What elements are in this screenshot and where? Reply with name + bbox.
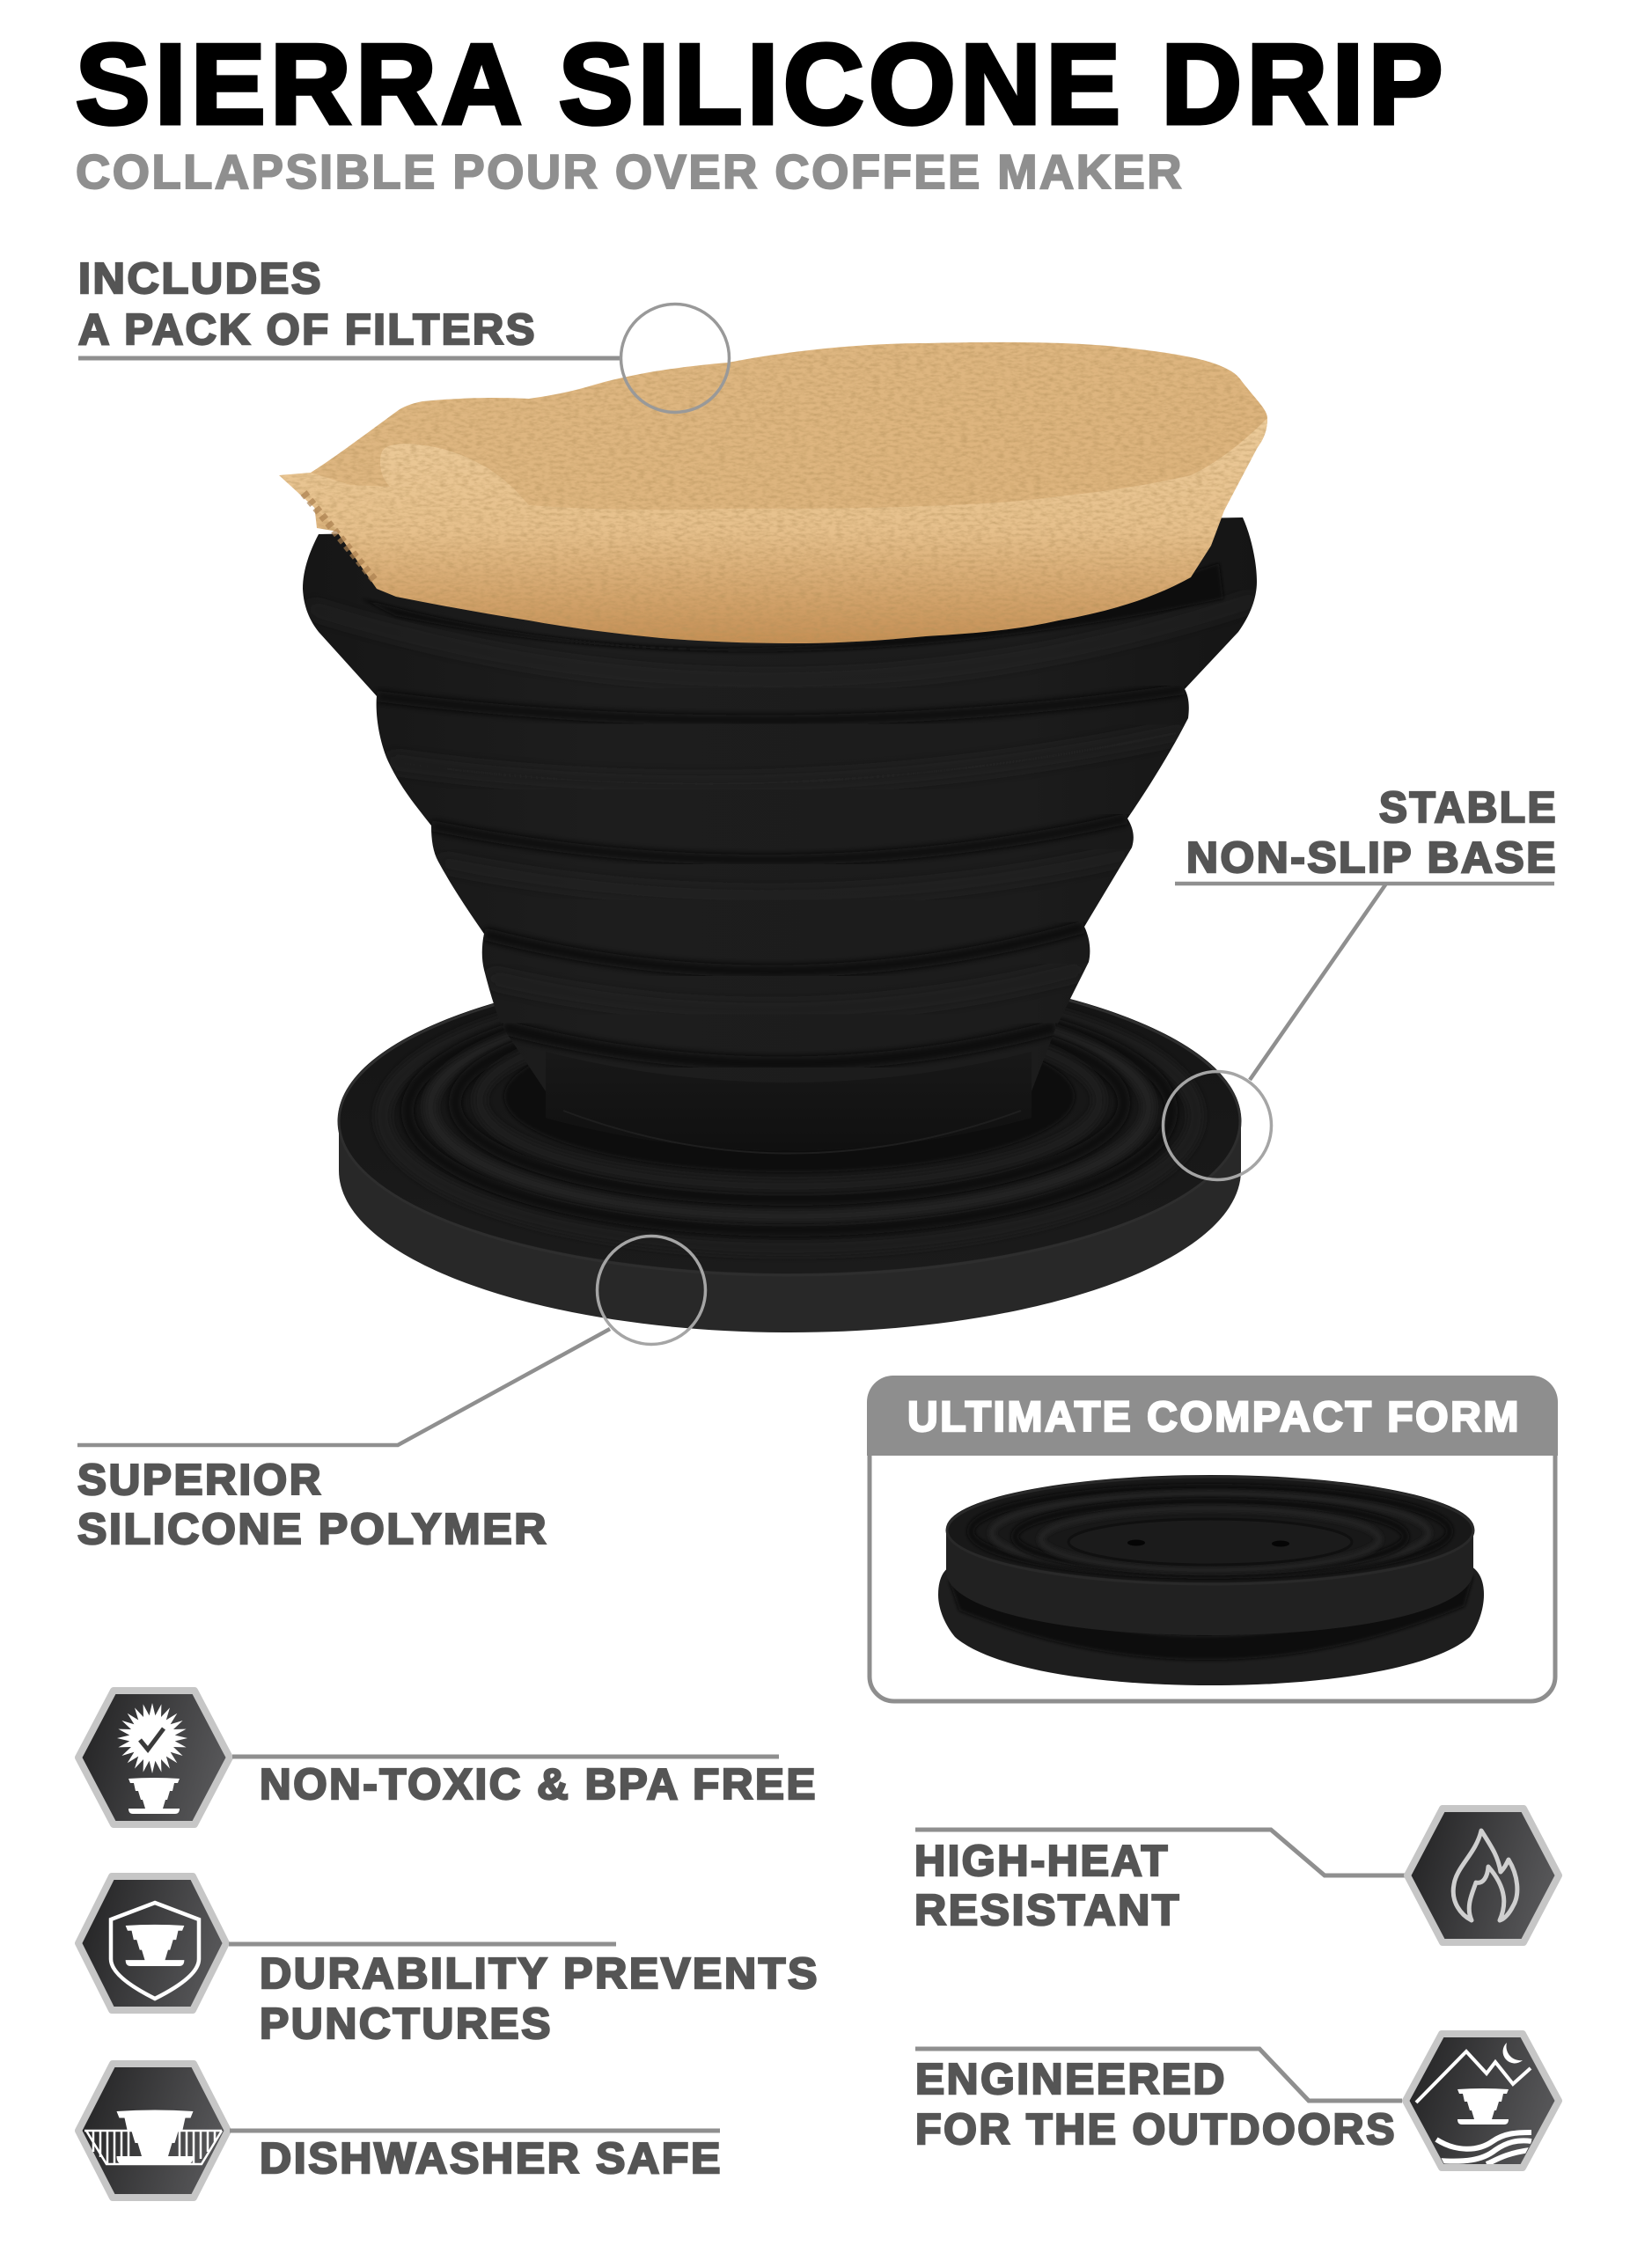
feature: engineered for the outdoors: ENGINEERED bbox=[915, 2056, 1227, 2103]
callout: superior silicone polymer: SUPERIOR bbox=[77, 1457, 323, 1504]
collapsible cup body bbox=[303, 517, 1259, 1153]
callout: includes a pack of filters bbox=[78, 255, 729, 412]
icon: hexagon with drip in dish rack bbox=[78, 2064, 228, 2198]
callout: superior silicone polymer bbox=[77, 1236, 706, 1553]
panel: ultimate compact form bbox=[867, 1376, 1558, 1701]
feature: high-heat resistant bbox=[914, 1809, 1559, 1942]
icon: hexagon with sunburst check and drip bbox=[78, 1691, 230, 1824]
title: SIERRA SILICONE DRIP bbox=[76, 21, 1448, 148]
callout: includes a pack of filters: A PACK OF FILTERS bbox=[78, 306, 537, 354]
rim shadow under filter bbox=[361, 563, 1223, 651]
filter front wall bbox=[279, 418, 1267, 643]
feature: durability prevents punctures: DURABILITY PREVENTS bbox=[260, 1950, 819, 1998]
callout: stable non-slip base bbox=[1164, 784, 1558, 1179]
icon: hexagon with flame bbox=[1407, 1809, 1559, 1942]
feature: engineered for the outdoors: FOR THE OUTDOORS bbox=[915, 2106, 1397, 2154]
panel header bbox=[867, 1376, 1558, 1456]
filter back interior bbox=[311, 342, 1267, 563]
feature: dishwasher safe bbox=[78, 2064, 723, 2198]
collapsed drip product bbox=[938, 1475, 1484, 1685]
panel heading: ULTIMATE COMPACT FORM bbox=[907, 1394, 1521, 1441]
feature: high-heat resistant: HIGH-HEAT bbox=[914, 1838, 1170, 1885]
filter stamped edge bbox=[304, 493, 377, 583]
base plate with concentric rings bbox=[338, 965, 1241, 1332]
callout: stable non-slip base: NON-SLIP BASE bbox=[1186, 834, 1558, 882]
feature: durability prevents punctures bbox=[78, 1876, 819, 2048]
callout: superior silicone polymer: SILICONE POLYMER bbox=[77, 1506, 548, 1553]
feature: non-toxic and BPA free bbox=[78, 1691, 818, 1824]
feature: engineered for the outdoors bbox=[915, 2034, 1559, 2168]
feature: durability prevents punctures: PUNCTURES bbox=[260, 2000, 553, 2048]
feature: dishwasher safe: DISHWASHER SAFE bbox=[260, 2135, 723, 2183]
icon: hexagon with shield and drip bbox=[78, 1876, 226, 2010]
product: collapsible silicone drip with filter bbox=[279, 342, 1267, 1332]
callout: stable non-slip base: STABLE bbox=[1379, 784, 1558, 832]
paper filter bbox=[279, 342, 1267, 643]
feature: non-toxic and BPA free: NON-TOXIC & BPA FREE bbox=[260, 1761, 818, 1809]
callout: includes a pack of filters: INCLUDES bbox=[78, 255, 323, 303]
feature: high-heat resistant: RESISTANT bbox=[914, 1887, 1181, 1934]
icon: hexagon with mountains, moon, waves and drip bbox=[1406, 2034, 1559, 2168]
subtitle: COLLAPSIBLE POUR OVER COFFEE MAKER bbox=[76, 144, 1184, 199]
